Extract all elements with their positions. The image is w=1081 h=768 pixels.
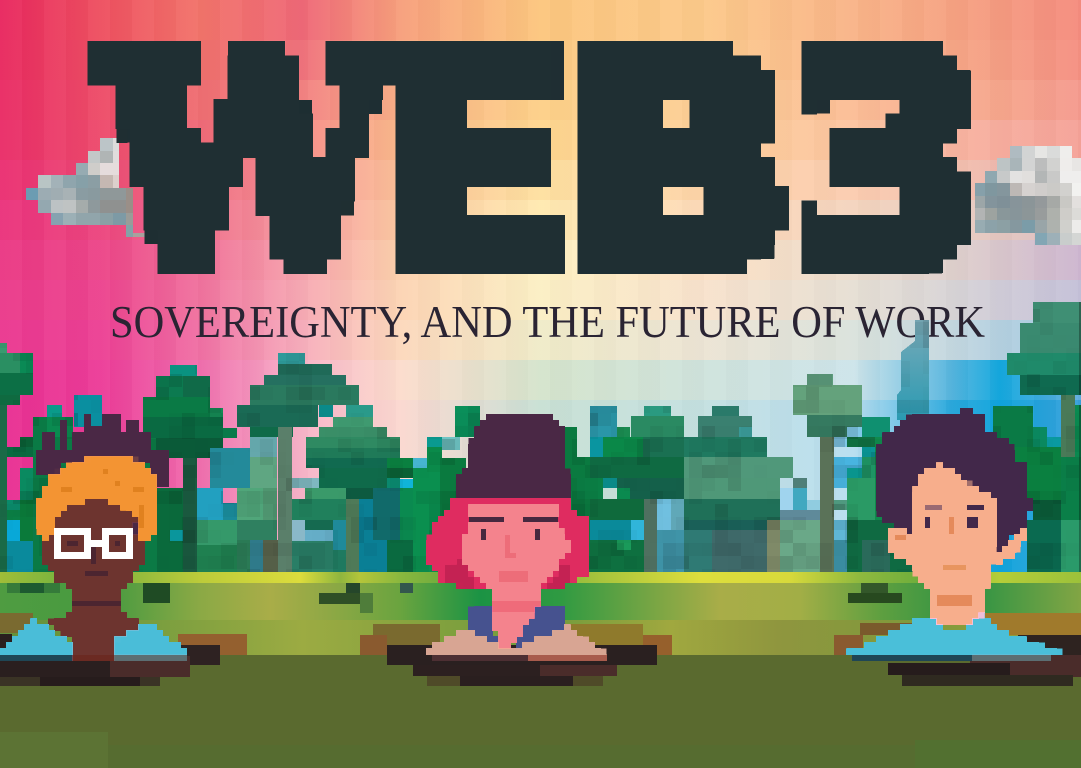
character: left person with orange headwrap and glasses (0, 415, 187, 662)
left edge tree (0, 343, 33, 572)
holes in the ground (0, 613, 1081, 686)
ground (0, 572, 1081, 768)
title: WEB3: 3 (791, 0, 984, 334)
tan coat (424, 627, 604, 657)
blue shirt (848, 615, 1060, 657)
tree A (143, 365, 237, 572)
title: WEB3: W (96, 0, 396, 336)
headwrap folds (63, 466, 144, 530)
character: middle person with beanie and red hair (424, 414, 604, 663)
neck (933, 590, 982, 623)
dreadlocks (37, 415, 168, 487)
right forest (993, 406, 1033, 447)
tree F (793, 374, 862, 572)
face (460, 503, 568, 613)
character: right person with dark hair and blue shirt (848, 406, 1060, 663)
features (897, 503, 982, 570)
eyes, nose and mouth (69, 540, 119, 604)
tree C (306, 405, 400, 572)
top-right tree (1007, 302, 1081, 395)
sky gradient background (0, 0, 1081, 572)
tree B (237, 353, 359, 572)
subtitle: SOVEREIGNTY, AND THE FUTURE OF WORK (110, 297, 985, 347)
face and ears (912, 465, 997, 593)
glasses (60, 533, 128, 555)
red hair (424, 500, 586, 590)
blue collar (466, 608, 502, 648)
beanie (454, 414, 568, 500)
clouds behind the title (26, 138, 1081, 245)
title: WEB3: B (558, 0, 795, 336)
left cloud (26, 138, 147, 237)
orange headwrap (37, 457, 157, 540)
centre-right trees (555, 427, 577, 572)
features (466, 516, 556, 580)
title: WEB3: E (385, 0, 569, 336)
face and chest (43, 500, 143, 660)
pixel forest background (0, 302, 1081, 572)
title: WEB3 (96, 0, 984, 336)
dark hair (876, 406, 1031, 557)
right cloud (975, 146, 1081, 245)
shirt (0, 620, 75, 655)
